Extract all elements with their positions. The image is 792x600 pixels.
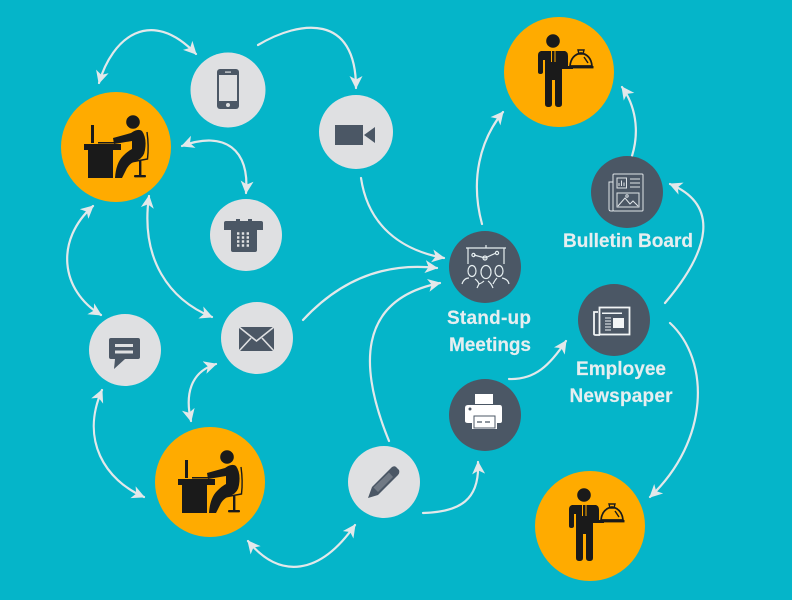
- arrows: connections between channels: [67, 28, 703, 567]
- node: waiter, bottom: [535, 471, 645, 581]
- arrow: desk worker to mobile phone: [99, 30, 196, 83]
- node: desk worker, top left: [61, 92, 171, 202]
- arrow: bulletin board to top waiter: [622, 87, 636, 156]
- node: waiter, top: [504, 17, 614, 127]
- arrow: video to stand-up meetings: [361, 178, 444, 258]
- arrow: desk worker to email: [147, 196, 212, 317]
- label: Employee Newspaper: Employee: [576, 359, 666, 380]
- label: Stand-up Meetings: [447, 308, 531, 356]
- icon: mobile phone: [190, 52, 266, 128]
- arrow: mobile phone to video: [258, 28, 356, 88]
- label: Employee Newspaper: Newspaper: [570, 386, 673, 407]
- icon: stand-up meetings: [449, 231, 521, 303]
- arrow: stand-up meetings to top waiter: [477, 112, 503, 224]
- arrow: printer to employee newspaper: [509, 341, 566, 379]
- icon: pencil: [348, 446, 420, 518]
- arrow: chat to second desk worker: [94, 390, 144, 497]
- node: desk worker, bottom: [155, 427, 265, 537]
- arrow: desk worker to chat: [67, 206, 101, 315]
- arrow: employee newspaper to bulletin board: [665, 184, 703, 303]
- label: Bulletin Board: Bulletin Board: [563, 231, 693, 252]
- arrow: email to second desk worker: [189, 364, 216, 421]
- icon: envelope: [221, 302, 293, 374]
- icon: desk telephone: [210, 199, 282, 271]
- arrow: second desk worker to pencil: [248, 525, 355, 567]
- label: Stand-up Meetings: Meetings: [449, 335, 531, 356]
- icon: printer: [449, 379, 521, 451]
- arrow: employee newspaper to bottom waiter: [650, 323, 698, 497]
- icon: bulletin board: [591, 156, 663, 228]
- label: Employee Newspaper: [570, 359, 673, 407]
- arrow: pencil to printer: [423, 462, 478, 513]
- icon: chat bubble: [89, 314, 161, 386]
- arrow: pencil to stand-up meetings: [370, 283, 440, 441]
- arrow: email to stand-up meetings: [303, 267, 437, 320]
- icon: video camera: [319, 95, 393, 169]
- label: Stand-up Meetings: Stand-up: [447, 308, 531, 329]
- arrow: desk worker to desk phone: [182, 141, 246, 193]
- icon: employee newspaper: [578, 284, 650, 356]
